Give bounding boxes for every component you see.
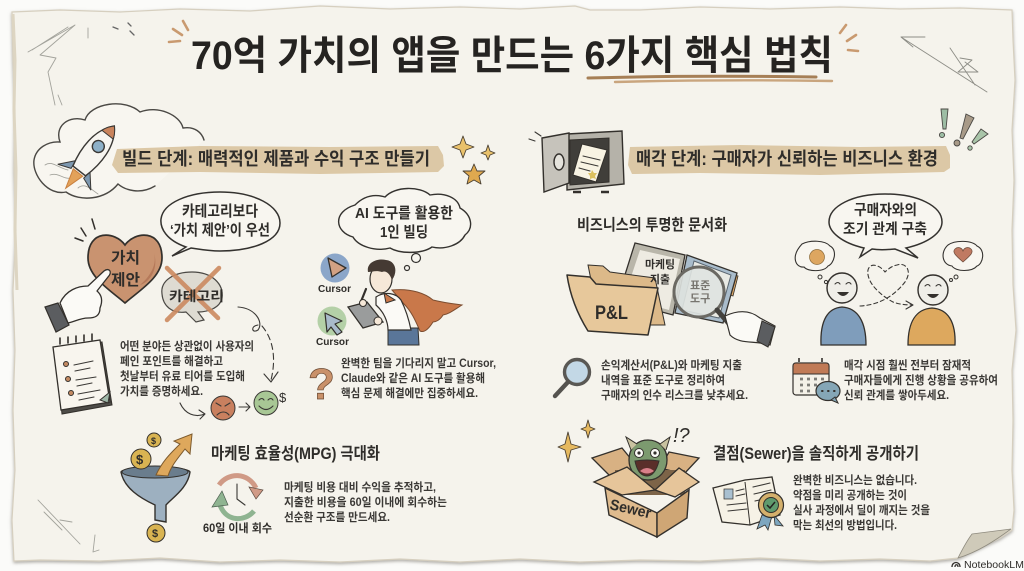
title xyxy=(169,21,858,82)
title text: 70억 가치의 앱을 만드는 6가지 핵심 법칙 xyxy=(191,34,833,78)
speech bubble: value proposition first: 카테고리보다 xyxy=(182,203,258,220)
text: marketing description: 선순환 구조를 만드세요. xyxy=(284,510,390,524)
icon: heart: 제안 xyxy=(111,271,140,289)
icon: crossed-out brain: 카테고리 xyxy=(169,289,224,304)
icon: notepad xyxy=(53,334,112,414)
icon: angry to happy faces: $ xyxy=(279,390,287,405)
illustration: folder and documents with magnifier: 표준 xyxy=(690,279,710,292)
text: documentation description: 내역을 표준 도구로 정리하여 xyxy=(601,373,725,387)
text: relationship description: 구매자들에게 진행 상황을 공유하여 xyxy=(844,373,998,387)
title underline xyxy=(588,76,832,82)
text: relationship description xyxy=(844,358,998,402)
icon: funnel with coins and arrow: $ xyxy=(136,452,144,467)
block: marketing efficiency xyxy=(121,433,447,542)
block: value proposition xyxy=(45,192,287,420)
illustration: monster in Sewer box: !? xyxy=(673,425,691,447)
illustration: folder and documents with magnifier: 마케팅 xyxy=(645,257,675,271)
icon: left title sparks xyxy=(169,21,188,42)
text: documentation description: 구매자의 인수 리스크를 낮추세요. xyxy=(601,388,748,402)
text: flaws description: 완벽한 비즈니스는 없습니다. xyxy=(793,473,917,487)
decorative scribble: bottom left xyxy=(38,500,99,552)
speech bubble: value proposition first: ‘가치 제안’이 우선 xyxy=(170,222,270,239)
text: relationship description: 신뢰 관계를 쌓아두세요. xyxy=(844,388,949,402)
NotebookLM watermark: NotebookLM xyxy=(964,559,1024,571)
decorative arrow: top right xyxy=(901,37,987,92)
icon: small magnifying glass xyxy=(555,360,590,396)
icon: question mark: ? xyxy=(308,360,335,409)
cloud bubble: AI tools xyxy=(339,188,471,252)
icon: heart xyxy=(75,219,162,303)
cloud bubble: AI tools: AI 도구를 활용한 xyxy=(355,205,453,222)
text: AI tools description: 완벽한 팀을 기다리지 말고 Cursor, xyxy=(341,356,496,370)
text: marketing description: 지출한 비용을 60일 이내에 회수하는 xyxy=(284,495,447,509)
text: flaws description: 막는 최선의 방법입니다. xyxy=(793,518,897,532)
icon: left person xyxy=(821,273,866,345)
arrow: dashed curve to smile xyxy=(238,307,278,382)
icon: Cursor blue: Cursor xyxy=(318,283,351,295)
icon: funnel with coins and arrow xyxy=(121,433,192,542)
illustration: folder and documents with magnifier: 지출 xyxy=(650,273,670,286)
speech bubble: early relationship: 조기 관계 구축 xyxy=(843,221,927,238)
text: marketing description xyxy=(284,480,447,524)
section heading: build stage xyxy=(112,146,444,174)
icon: right person xyxy=(908,275,955,345)
block: transparent documentation xyxy=(555,216,775,402)
icon: funnel with coins and arrow: $ xyxy=(151,436,156,446)
icon: heart: 가치 xyxy=(111,249,140,267)
icon: left thought cloud with smile xyxy=(795,241,834,284)
icon: Cursor blue xyxy=(318,254,351,295)
icon: funnel with coins and arrow: $ xyxy=(152,528,158,540)
text: value proposition description: 어떤 분야든 상관없이 사용자의 xyxy=(120,339,254,353)
icon: calendar with chat xyxy=(793,358,840,403)
speech bubble: value proposition first xyxy=(161,192,280,256)
icon: Cursor green: Cursor xyxy=(316,336,349,348)
panel: build stage xyxy=(34,104,496,542)
heading: marketing efficiency: 마케팅 효율성(MPG) 극대화 xyxy=(211,444,380,463)
block: AI tools solo building xyxy=(308,188,496,409)
text: AI tools description xyxy=(341,356,496,400)
illustration: monster in Sewer box xyxy=(592,425,699,537)
text: flaws description: 약점을 미리 공개하는 것이 xyxy=(793,488,907,502)
text: flaws description: 실사 과정에서 딜이 깨지는 것을 xyxy=(793,503,930,517)
text: value proposition description: 가치를 증명하세요. xyxy=(120,384,203,398)
text: AI tools description: 핵심 문제 해결에만 집중하세요. xyxy=(341,386,478,400)
thought dots xyxy=(404,254,420,270)
section heading: sell stage xyxy=(628,145,950,175)
illustration: folder and documents with magnifier xyxy=(567,243,775,347)
icon: Cursor green xyxy=(316,306,349,348)
cloud bubble: AI tools: 1인 빌딩 xyxy=(380,224,428,241)
icon: right thought cloud with heart xyxy=(943,241,983,282)
page curl corner xyxy=(958,529,1011,558)
text: value proposition description: 페인 포인트를 해결하고 xyxy=(120,354,223,368)
icon: dashed heart path with arrow xyxy=(860,264,913,309)
heading: disclose flaws: 결점(Sewer)을 솔직하게 공개하기 xyxy=(713,444,919,463)
heading: transparent documentation: 비즈니스의 투명한 문서화 xyxy=(577,216,727,234)
section heading: build stage: 빌드 단계: 매력적인 제품과 수익 구조 만들기 xyxy=(122,149,430,169)
icon: open book with rosette xyxy=(713,477,784,530)
label: recovery within 60 days: 60일 이내 회수 xyxy=(203,521,272,535)
text: value proposition description xyxy=(120,339,254,398)
illustration: folder and documents with magnifier: 도구 xyxy=(690,292,710,305)
illustration: monster in Sewer box: Sewer xyxy=(608,496,653,522)
block: early buyer relationships xyxy=(793,194,998,403)
icon: crossed-out brain xyxy=(162,268,224,322)
icon: exclamation marks xyxy=(939,109,988,150)
icon: clock with cycle arrows xyxy=(212,476,263,519)
decorative scribble: top left xyxy=(28,23,134,105)
icon: open safe with document xyxy=(529,131,624,192)
icon: gold sparkles xyxy=(558,420,595,462)
text: marketing description: 마케팅 비용 대비 수익을 추적하고, xyxy=(284,480,436,494)
section heading: sell stage: 매각 단계: 구매자가 신뢰하는 비즈니스 환경 xyxy=(636,149,938,169)
text: value proposition description: 첫날부터 유료 티어를 도입해 xyxy=(120,369,245,383)
icon: right title sparks xyxy=(840,25,858,51)
icon: sparkles and star xyxy=(452,136,495,184)
illustration: folder and documents with magnifier: P&L xyxy=(595,303,628,324)
text: flaws description xyxy=(793,473,930,532)
speech bubble: early relationship xyxy=(829,194,942,258)
block: disclose flaws xyxy=(558,420,930,537)
speech bubble: early relationship: 구매자와의 xyxy=(854,202,917,219)
text: documentation description: 손익계산서(P&L)와 마케팅 지출 xyxy=(601,358,742,372)
icon: angry to happy faces xyxy=(180,390,287,420)
icon: pointing hand xyxy=(45,270,110,332)
text: relationship description: 매각 시점 훨씬 전부터 잠재적 xyxy=(844,358,971,372)
icon: cloud with rocket xyxy=(34,104,204,201)
illustration: person with cape and tablet xyxy=(348,260,462,345)
text: AI tools description: Claude와 같은 AI 도구를 활용해 xyxy=(341,371,485,385)
text: documentation description xyxy=(601,358,748,402)
panel: sell stage xyxy=(529,109,998,537)
